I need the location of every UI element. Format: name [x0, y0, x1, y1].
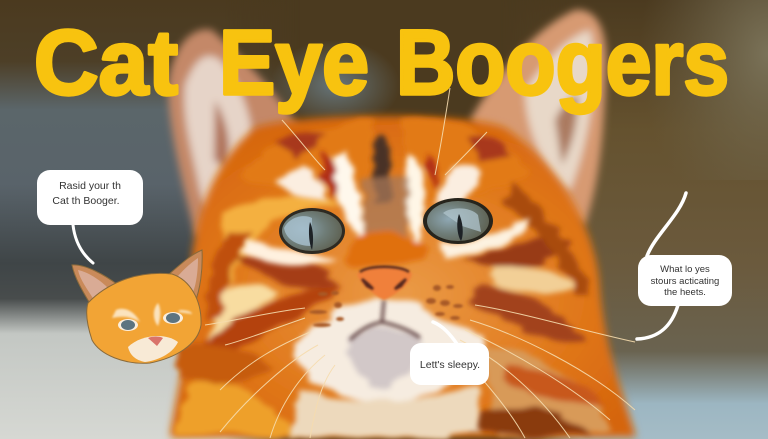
callout: left	[37, 170, 143, 263]
nose	[357, 267, 412, 300]
callout: bottom: Lett's sleepy.	[420, 359, 480, 371]
forehead markings	[240, 136, 532, 266]
small cat ears	[72, 250, 202, 312]
small cat inner ears	[78, 258, 198, 300]
callout: left: Rasid your th	[59, 180, 121, 192]
small cat muzzle	[128, 336, 178, 362]
left eye	[279, 208, 345, 254]
title: Boogers	[396, 12, 729, 114]
whiskers	[205, 88, 635, 438]
left ear	[168, 29, 300, 240]
title: Eye	[219, 12, 369, 114]
small cat forehead marks	[112, 303, 192, 326]
fur stripes	[172, 120, 612, 437]
right ear	[470, 10, 606, 225]
callout: right: What lo yes	[660, 264, 710, 275]
callout: right	[637, 193, 732, 339]
mouth	[350, 300, 420, 340]
small cat nose	[148, 336, 163, 346]
large cat	[168, 10, 636, 438]
face fur base	[170, 116, 636, 437]
callout: bottom	[410, 322, 489, 385]
small cat head	[87, 273, 201, 363]
callout: right: the heets.	[664, 287, 706, 298]
right eye	[423, 198, 493, 244]
muzzle	[290, 298, 482, 437]
title: Cat	[34, 12, 178, 114]
callout: left: Cat th Booger.	[52, 195, 120, 207]
title	[34, 12, 729, 114]
small cat icon	[72, 250, 202, 363]
small cat eyes	[118, 312, 183, 331]
callout: right: stours acticating	[651, 276, 719, 287]
whisker spots	[309, 285, 463, 327]
